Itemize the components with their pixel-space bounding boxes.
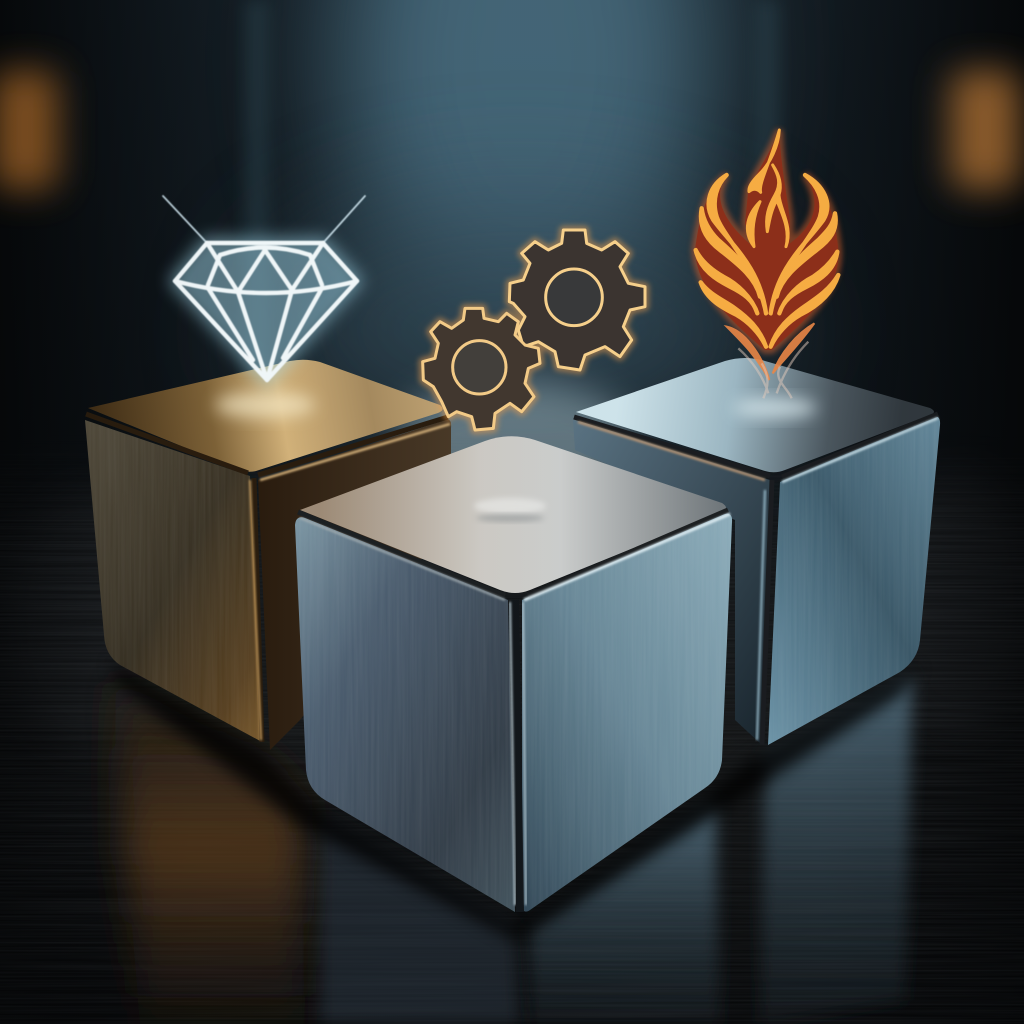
phoenix pale wisps <box>738 342 808 398</box>
left cube right face <box>258 420 451 750</box>
glow on right cube top <box>733 398 817 418</box>
brushed metal texture <box>104 425 915 902</box>
phoenix red body <box>695 130 838 350</box>
icon: diamond <box>163 196 365 380</box>
small gear <box>423 308 540 430</box>
diamond facets <box>175 243 357 380</box>
right steel cube <box>573 358 940 745</box>
left gold cube <box>85 360 451 750</box>
center cube vertical edge <box>515 600 520 912</box>
left cube left face <box>85 420 262 742</box>
center cube top dimple <box>474 498 546 514</box>
cube shadow on floor <box>110 660 920 940</box>
large gear <box>509 230 645 370</box>
center cube top face <box>300 436 726 593</box>
phoenix head and crest <box>747 130 788 247</box>
right cube top face <box>576 358 934 472</box>
right cube edges <box>574 414 938 745</box>
center cube edges <box>298 510 728 596</box>
icon: gears <box>423 230 645 430</box>
diamond glow <box>175 243 357 380</box>
center cube left face <box>295 517 515 912</box>
glow on left cube top <box>215 392 315 418</box>
phoenix right wing <box>771 175 838 347</box>
phoenix tail feathers <box>727 323 814 380</box>
blurred amber light right <box>950 70 1020 190</box>
right cube left face <box>573 420 770 745</box>
phoenix glow <box>695 130 838 350</box>
phoenix left wing <box>696 175 766 347</box>
blurred amber light left <box>0 70 58 190</box>
small gear hub <box>453 341 506 394</box>
icon: phoenix flame <box>695 130 838 398</box>
diamond sparkle rays <box>163 196 365 243</box>
right cube right face <box>768 417 940 745</box>
left cube edge highlights <box>86 414 448 742</box>
center steel cube <box>295 436 732 912</box>
left cube top face <box>88 360 443 472</box>
large gear hub <box>546 269 602 326</box>
floor reflections <box>112 675 912 1024</box>
gear glow <box>423 230 645 430</box>
center cube right face <box>522 514 732 912</box>
